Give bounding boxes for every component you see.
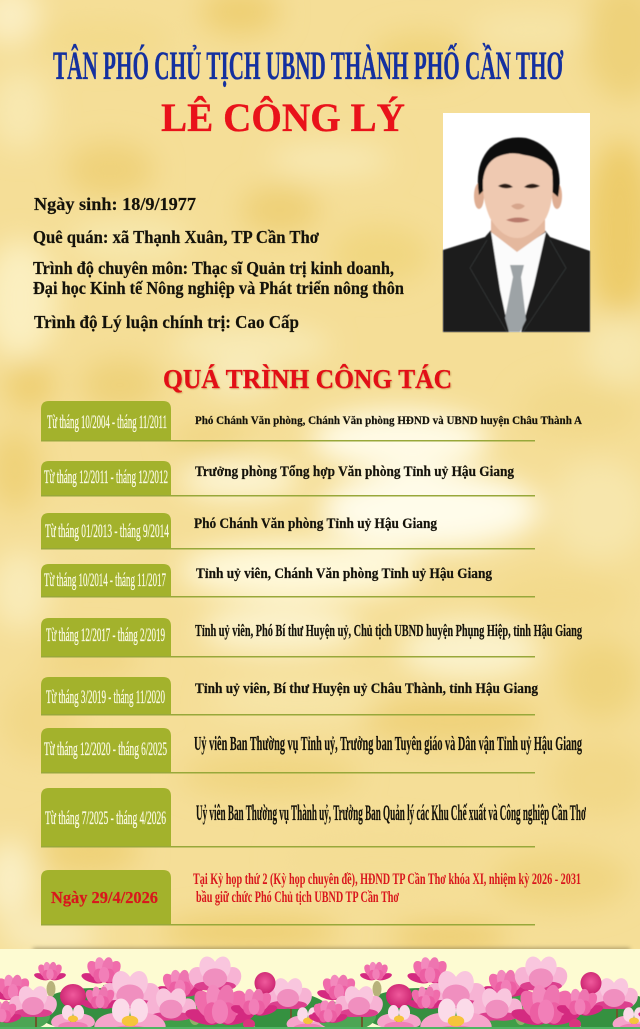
timeline row 1: Từ tháng 10/2004 - tháng 11/2011 (47, 413, 167, 433)
hair (478, 137, 560, 197)
timeline row 2: Trưởng phòng Tổng hợp Văn phòng Tỉnh uỷ Hậu Giang (195, 464, 515, 480)
timeline row 7 (41, 728, 582, 774)
ears (474, 183, 484, 209)
timeline row 2: Từ tháng 12/2011 - tháng 12/2012 (44, 468, 168, 488)
education: Trình độ chuyên môn: Thạc sĩ Quản trị kinh doanh, (33, 258, 394, 278)
timeline row 6: Tỉnh uỷ viên, Bí thư Huyện uỷ Châu Thành, tỉnh Hậu Giang (195, 681, 539, 697)
timeline row 2 (41, 461, 535, 496)
political theory: Trình độ Lý luận chính trị: Cao Cấp (34, 312, 299, 332)
timeline row 5: Từ tháng 12/2017 - tháng 2/2019 (46, 626, 165, 646)
footer lotus band (0, 948, 640, 1029)
timeline row 6: Từ tháng 3/2019 - tháng 11/2020 (46, 688, 165, 708)
timeline row 7: Từ tháng 12/2020 - tháng 6/2025 (44, 740, 167, 760)
timeline row 1: Phó Chánh Văn phòng, Chánh Văn phòng HĐND và UBND huyện Châu Thành A (195, 413, 582, 427)
timeline row 6 (41, 677, 539, 716)
section heading: QUÁ TRÌNH CÔNG TÁC (163, 364, 452, 394)
timeline row 1 (41, 401, 582, 442)
suit (443, 229, 590, 332)
face (483, 153, 553, 238)
timeline row 4: Từ tháng 10/2014 - tháng 11/2017 (44, 571, 166, 591)
timeline row 4: Tỉnh uỷ viên, Chánh Văn phòng Tỉnh uỷ Hậu Giang (196, 566, 493, 582)
education (33, 258, 404, 298)
lapel lines (470, 240, 566, 332)
shirt (491, 232, 546, 332)
timeline row 9 highlighted (41, 870, 581, 926)
birth date: Ngày sinh: 18/9/1977 (34, 194, 196, 214)
timeline row 3: Phó Chánh Văn phòng Tỉnh uỷ Hậu Giang (194, 516, 438, 532)
timeline row 9 highlighted: Ngày 29/4/2026 (51, 888, 158, 907)
timeline row 5 (41, 618, 582, 658)
brows and eyes (498, 184, 513, 188)
timeline row 8: Từ tháng 7/2025 - tháng 4/2026 (45, 809, 166, 829)
timeline row 4 (41, 564, 535, 598)
hometown: Quê quán: xã Thạnh Xuân, TP Cần Thơ (33, 227, 319, 247)
timeline row 3: Từ tháng 01/2013 - tháng 9/2014 (45, 522, 169, 542)
name heading: LÊ CÔNG LÝ (161, 95, 405, 140)
timeline row 9 highlighted: bầu giữ chức Phó Chủ tịch UBND TP Cần Thơ (196, 889, 399, 906)
portrait photo (443, 113, 590, 332)
education: Đại học Kinh tế Nông nghiệp và Phát triển nông thôn (33, 278, 404, 298)
neck (491, 210, 545, 252)
timeline row 3 (41, 513, 535, 550)
tie (505, 265, 526, 332)
timeline row 8 (41, 788, 586, 848)
section heading: QUÁ TRÌNH CÔNG TÁC (164, 365, 453, 395)
